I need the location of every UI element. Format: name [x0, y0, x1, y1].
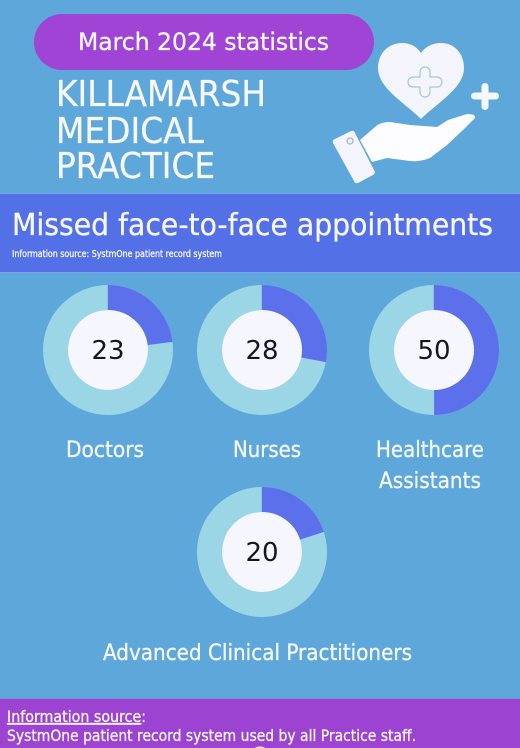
donut: nurses 28: 28	[245, 336, 279, 366]
footer: information source	[0, 698, 520, 748]
label: healthcare assistants: Assistants	[379, 469, 481, 494]
donut: advanced clinical practitioners 20: 20	[245, 538, 279, 568]
donut: doctors 23	[56, 298, 160, 402]
label: healthcare assistants: Healthcare	[376, 438, 484, 463]
banner heading: Missed face-to-face appointments	[12, 208, 493, 243]
label: nurses: Nurses	[233, 438, 301, 463]
title: KILLAMARSH	[56, 74, 266, 115]
label: advanced clinical practitioners: Advanced Clinical Practitioners	[103, 641, 412, 666]
donut: advanced clinical practitioners 20	[210, 500, 314, 604]
label: doctors: Doctors	[66, 438, 144, 463]
donut: nurses 28	[210, 298, 314, 402]
label: healthcare assistants	[376, 438, 484, 494]
donut: doctors 23: 23	[91, 336, 125, 366]
banner: missed appointments	[0, 193, 520, 273]
title	[56, 74, 266, 187]
date pill: March 2024 statistics	[78, 28, 329, 56]
donut: healthcare assistants 50: 50	[417, 336, 451, 366]
date pill	[34, 14, 374, 70]
footer: information source: Information source:	[7, 707, 146, 726]
title: PRACTICE	[56, 146, 215, 187]
footer: information source: SystmOne patient record system used by all Practice staff.	[7, 726, 416, 745]
icon: hand holding heart	[333, 43, 499, 183]
banner source note: Information source: SystmOne patient record system	[12, 249, 222, 260]
donut: healthcare assistants 50	[382, 298, 486, 402]
title: MEDICAL	[56, 111, 204, 152]
